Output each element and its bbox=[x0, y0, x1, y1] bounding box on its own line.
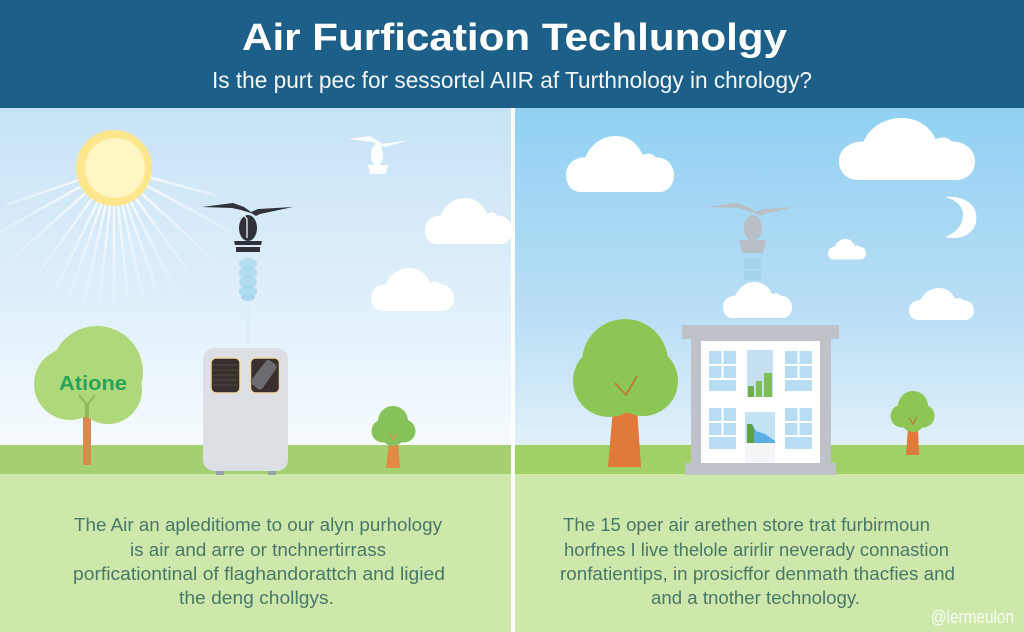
panel: left sky bbox=[0, 108, 511, 446]
icon: sun with rays bbox=[0, 130, 232, 315]
icon: air coil bbox=[239, 258, 257, 301]
tree label: Atione bbox=[59, 373, 127, 395]
building bbox=[682, 325, 839, 475]
left vent bbox=[211, 358, 240, 393]
icon: dark purifier fan bbox=[202, 203, 293, 348]
cloud: right small bbox=[828, 239, 866, 260]
cloud: right upper right bbox=[839, 118, 975, 180]
cloud: left lower bbox=[371, 268, 454, 311]
text block: right caption: horfnes I live thelole arirlir neverady connastion bbox=[564, 540, 949, 560]
air purifier unit bbox=[203, 348, 288, 475]
title: Air Furfication Techlunolgy bbox=[242, 17, 787, 59]
tree: right large with check bbox=[573, 319, 678, 467]
panel divider bbox=[511, 108, 515, 632]
text block: left caption: the deng chollgys. bbox=[179, 588, 334, 608]
tree: left small bbox=[372, 406, 416, 468]
icon: white purifier fan bbox=[348, 136, 409, 174]
text block: left caption: The Air an apleditiome to our alyn purhology bbox=[74, 515, 442, 535]
text block: right caption: ronfatientips, in prosicffor denmath thacfies and bbox=[560, 564, 955, 584]
cloud: right centre bbox=[723, 282, 792, 318]
icon: crescent moon bbox=[945, 197, 976, 238]
text block: left caption: porficationtinal of flaghandorattch and ligied bbox=[73, 564, 445, 584]
text block: left caption bbox=[73, 515, 445, 608]
text block: right caption: The 15 oper air arethen store trat furbirmoun bbox=[563, 515, 930, 535]
right vent bbox=[250, 358, 280, 393]
panel: right sky bbox=[515, 108, 1024, 446]
tree: left with label bbox=[34, 326, 143, 465]
subtitle: Is the purt pec for sessortel AIIR af Turthnology in chrology? bbox=[212, 67, 812, 93]
text block: right caption bbox=[560, 515, 955, 608]
door with chart bbox=[745, 412, 775, 463]
icon: grey purifier fan bbox=[706, 203, 797, 280]
text block: left caption: is air and arre or tnchnertirrass bbox=[130, 540, 386, 560]
tree: right small bbox=[890, 391, 934, 455]
cloud: right upper left bbox=[566, 136, 674, 192]
left ground bbox=[0, 445, 511, 475]
right ground bbox=[515, 445, 1024, 475]
cloud: left upper bbox=[425, 198, 512, 244]
header band bbox=[0, 0, 1024, 108]
cloud: right lower bbox=[909, 288, 974, 320]
centre window with bar chart bbox=[747, 350, 773, 397]
panel: caption background bbox=[0, 474, 1024, 632]
text block: right caption: and a tnother technology. bbox=[651, 588, 860, 608]
windows bbox=[708, 350, 813, 450]
